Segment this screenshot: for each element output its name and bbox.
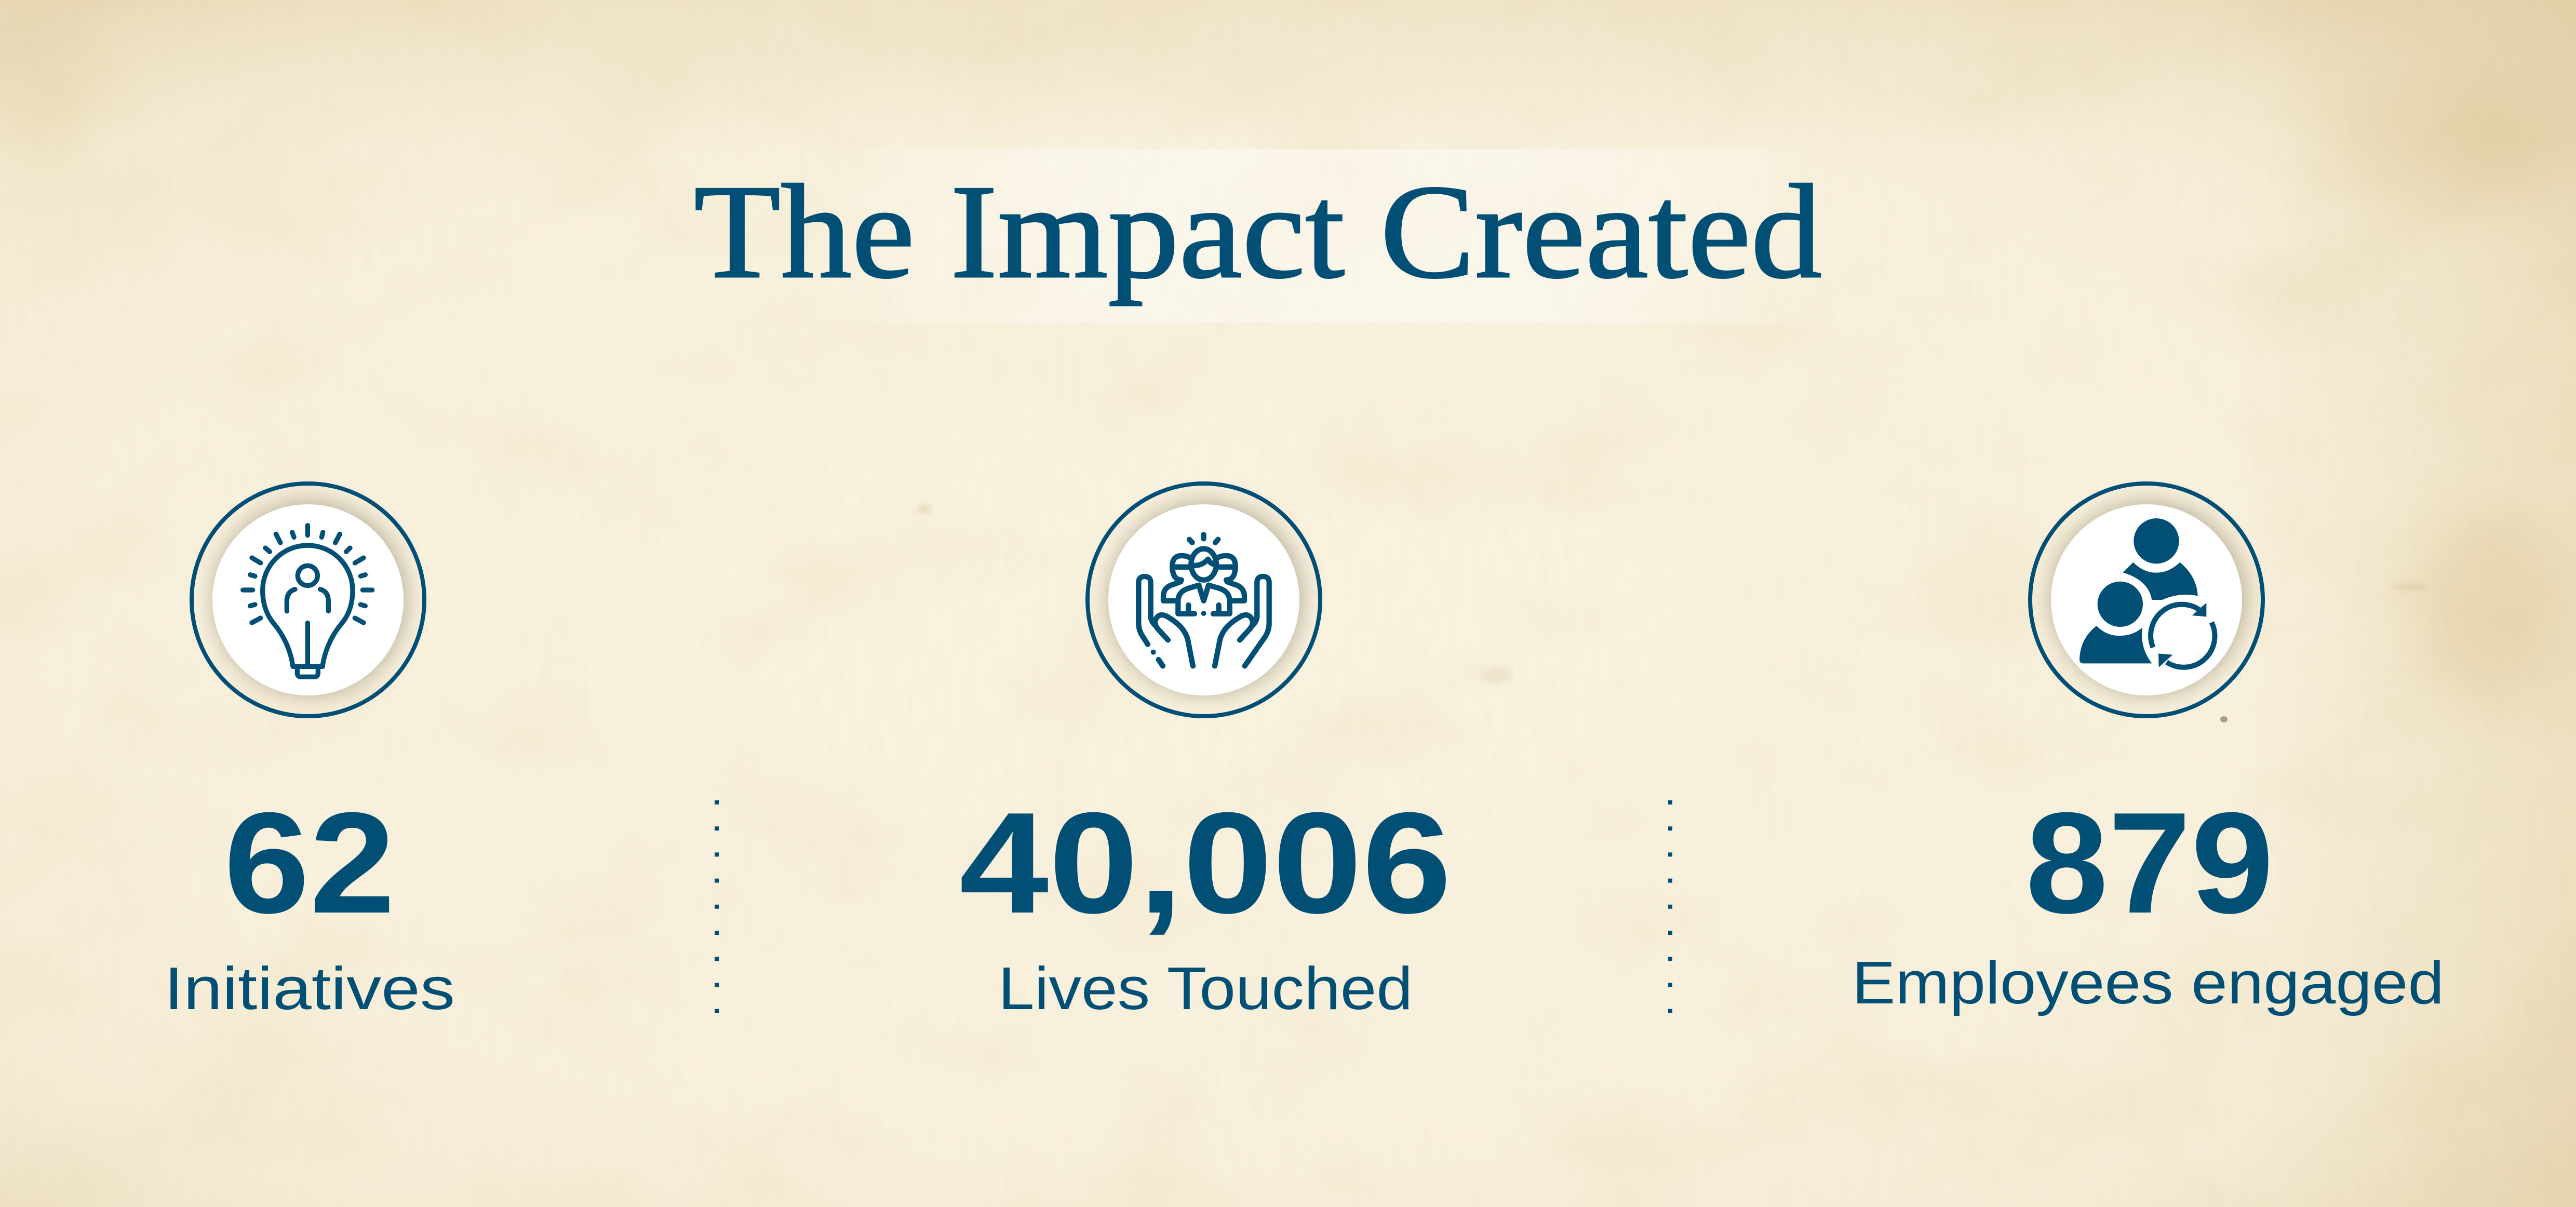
label: lives touched: Lives Touched bbox=[998, 955, 1413, 1022]
label: initiatives: Initiatives bbox=[164, 955, 455, 1022]
stat: employees engaged bbox=[1852, 484, 2444, 1016]
stat: lives touched bbox=[959, 484, 1452, 1022]
value: 62: 62 bbox=[224, 782, 395, 943]
divider: dotted line 1 bbox=[715, 800, 719, 1013]
icon: hands holding people bbox=[1088, 484, 1320, 716]
stat: initiatives bbox=[164, 484, 455, 1022]
divider: dotted line 2 bbox=[1668, 800, 1672, 1013]
value: 40,006: 40,006 bbox=[959, 782, 1452, 943]
label: employees engaged: Employees engaged bbox=[1852, 949, 2444, 1016]
icon: two people with refresh arrows bbox=[2030, 484, 2263, 716]
value: 879: 879 bbox=[2025, 782, 2274, 943]
title: The Impact Created bbox=[694, 157, 1822, 306]
title highlight band bbox=[779, 149, 1818, 323]
icon: light bulb with person bbox=[192, 484, 424, 716]
